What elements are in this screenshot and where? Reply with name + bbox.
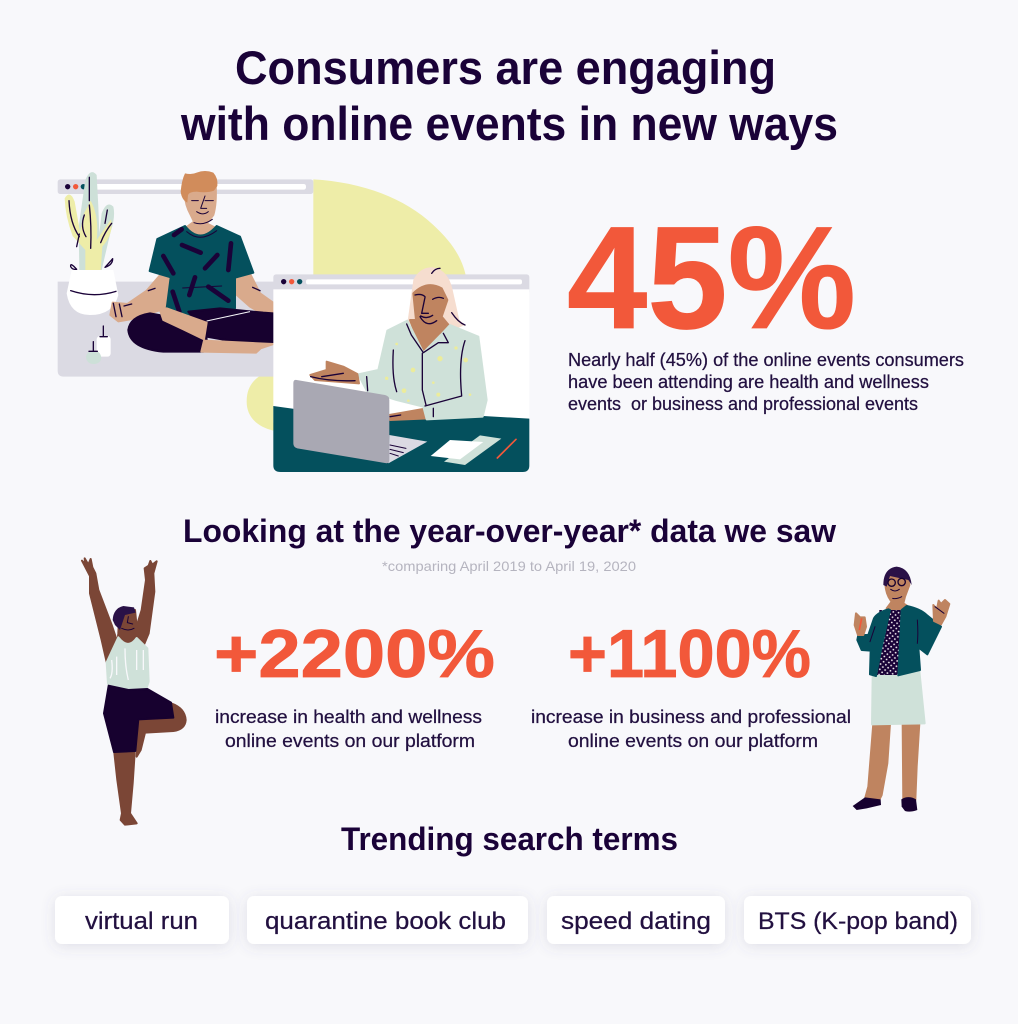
- window: meditating man: [58, 171, 313, 377]
- stat: +2200%: +2200%: [214, 616, 495, 692]
- caption: business and professional: increase in business and professional: [531, 706, 851, 727]
- papers and pen: [431, 435, 516, 465]
- caption: health and wellness: increase in health and wellness: [215, 706, 482, 727]
- caption: business and professional: online events on our platform: [568, 730, 818, 751]
- chip: virtual run: [55, 896, 229, 944]
- candles: [86, 326, 111, 364]
- yellow blob background: [247, 179, 467, 431]
- chip: BTS (K-pop band): BTS (K-pop band): [758, 908, 958, 935]
- laptop: [293, 380, 427, 463]
- woman: [310, 267, 487, 420]
- paragraph: 45% description: [568, 350, 964, 414]
- heading: trending search terms: Trending search terms: [341, 821, 678, 857]
- chip: speed dating: [547, 896, 725, 944]
- stat: +1100%: +1100%: [568, 616, 811, 692]
- chip: quarantine book club: quarantine book club: [265, 908, 506, 935]
- man: [110, 171, 274, 353]
- desk: [273, 406, 529, 472]
- illustration: standing businesswoman: [853, 567, 949, 812]
- footnote: *comparing April 2019 to April 19, 2020: [382, 558, 636, 574]
- chip: quarantine book club: [247, 896, 528, 944]
- title: with online events in new ways: [180, 97, 838, 150]
- caption: health and wellness: online events on our platform: [225, 730, 475, 751]
- illustration: online health and business events: [58, 171, 529, 472]
- paragraph: 45% description: have been attending are health and wellness: [568, 372, 929, 392]
- title: Consumers are engaging: [235, 41, 776, 94]
- chip: BTS (K-pop band): [744, 896, 971, 944]
- chip: virtual run: virtual run: [85, 908, 198, 935]
- title: [180, 41, 838, 150]
- chip: speed dating: speed dating: [561, 908, 711, 935]
- big stat: 45%: 45%: [567, 196, 856, 359]
- window: woman at laptop: [273, 267, 529, 472]
- caption: health and wellness: [215, 706, 482, 751]
- illustration: woman in yoga tree pose: [82, 558, 186, 825]
- paragraph: 45% description: Nearly half (45%) of the online events consumers: [568, 350, 964, 370]
- caption: business and professional: [531, 706, 851, 751]
- cactus plant: [65, 172, 118, 315]
- heading: year-over-year: Looking at the year-over-year* data we saw: [183, 513, 836, 549]
- paragraph: 45% description: events or business and professional events: [568, 394, 918, 414]
